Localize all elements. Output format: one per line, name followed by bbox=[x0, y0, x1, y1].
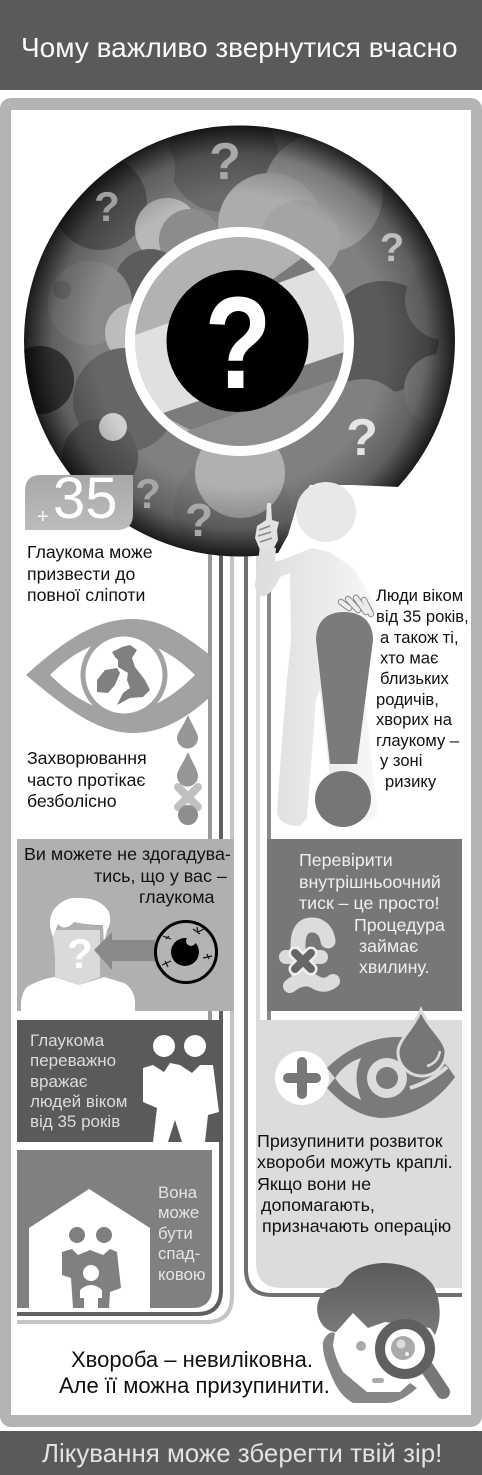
arrow bbox=[94, 932, 155, 970]
text: simple test: Перевірити bbox=[299, 850, 393, 870]
icon: face with magnifying glass bbox=[317, 1263, 443, 1403]
magnifying glass bbox=[427, 1368, 443, 1392]
text: risk group: ризику bbox=[385, 772, 437, 791]
text: treatment: допомагають, bbox=[261, 1195, 375, 1215]
text: risk group: від 35 років, bbox=[376, 607, 469, 626]
panel: treatment bbox=[256, 1010, 462, 1288]
text: risk group: хворих на bbox=[376, 710, 453, 729]
text: treatment: хвороби можуть краплі. bbox=[257, 1152, 453, 1172]
text: over 35: переважно bbox=[30, 1051, 116, 1070]
text: painless: безболісно bbox=[27, 791, 117, 811]
small question marks bbox=[94, 133, 404, 546]
text: over 35: людей віком bbox=[30, 1092, 127, 1111]
panel: hereditary bbox=[17, 1150, 212, 1308]
exclamation mark bbox=[316, 612, 373, 764]
text: over 35: від 35 років bbox=[30, 1112, 120, 1131]
small question marks: ? bbox=[346, 409, 378, 467]
bubbles bbox=[24, 126, 455, 556]
icon: pound sign crossed bbox=[286, 925, 333, 986]
text: unaware: Ви можете не здогадува- bbox=[24, 844, 231, 864]
text: painless: часто протікає bbox=[27, 770, 145, 790]
footer banner: Лікування може зберегти твій зір! bbox=[42, 1440, 442, 1468]
text: simple test: тиск – це просто! bbox=[299, 893, 439, 913]
figure with exclamation mark bbox=[255, 482, 378, 827]
+35 badge: + bbox=[37, 506, 49, 528]
face bbox=[333, 1313, 430, 1392]
hand pointing up bbox=[255, 503, 279, 550]
text: unaware: тись, що у вас – bbox=[94, 866, 227, 886]
text: blindness: Глаукома може bbox=[27, 542, 153, 562]
text: simple test: Процедура bbox=[354, 915, 445, 935]
text: hereditary: Вона bbox=[158, 1183, 198, 1202]
white cut-out behind person bbox=[262, 485, 460, 580]
central ring with question mark bbox=[130, 230, 350, 460]
icon: person with question mark: ? bbox=[67, 930, 93, 977]
small question marks: ? bbox=[94, 183, 120, 230]
text: incurable but can be stopped: Хвороба – невиліковна. bbox=[71, 1347, 313, 1372]
text: simple test: хвилину. bbox=[359, 957, 429, 977]
icon: two people bbox=[143, 1035, 219, 1142]
panel: simple test bbox=[267, 839, 462, 1011]
text: risk group: а також ті, bbox=[380, 628, 459, 647]
text: painless: Захворювання bbox=[27, 748, 147, 768]
text: simple test: займає bbox=[359, 936, 418, 956]
text: over 35: Глаукома bbox=[30, 1031, 105, 1050]
text: risk group: у зоні bbox=[380, 751, 422, 770]
small question marks: ? bbox=[209, 133, 241, 191]
text: unaware: глаукома bbox=[139, 887, 215, 907]
header banner bbox=[0, 0, 482, 90]
icon: house with family bbox=[29, 1189, 150, 1308]
text: hereditary: бути bbox=[158, 1224, 193, 1243]
icon: bloodshot eyeball bbox=[156, 922, 216, 982]
big question-mark circle bbox=[24, 126, 455, 556]
small question marks: ? bbox=[185, 494, 213, 546]
small question marks: ? bbox=[380, 226, 404, 270]
map of British Isles bbox=[97, 645, 150, 705]
text: hereditary: спад- bbox=[158, 1244, 200, 1263]
text: blindness: повної сліпоти bbox=[27, 585, 145, 605]
text: treatment: Призупинити розвиток bbox=[257, 1131, 443, 1151]
panel: unaware bbox=[17, 839, 236, 1011]
text: treatment: Якщо вони не bbox=[257, 1174, 371, 1194]
+35 badge: 35 bbox=[53, 466, 118, 531]
text: risk group: Люди віком bbox=[376, 586, 463, 605]
panel: mostly over 35 bbox=[17, 1020, 223, 1142]
text: over 35: вражає bbox=[30, 1072, 88, 1091]
icon: person with question mark bbox=[21, 898, 135, 1011]
text: risk group: близьких bbox=[380, 669, 449, 688]
text: blindness: призвести до bbox=[27, 564, 135, 584]
text: risk group: родичів, bbox=[376, 690, 439, 709]
jaw outline bbox=[323, 1332, 417, 1403]
icon: eye with British Isles bbox=[26, 619, 210, 733]
text: risk group: глаукому – bbox=[376, 731, 460, 750]
icon: drops and cross bbox=[177, 715, 198, 825]
icon: eye with drop and plus bbox=[275, 1010, 455, 1118]
text: hereditary: може bbox=[158, 1203, 199, 1222]
central ring with question mark: ? bbox=[204, 269, 272, 416]
text: incurable but can be stopped: Але її можна призупинити. bbox=[59, 1373, 330, 1398]
vertical connector stripes bbox=[17, 540, 462, 1322]
hair bbox=[317, 1263, 440, 1335]
text: treatment: призначають операцію bbox=[262, 1216, 451, 1236]
text: simple test: внутрішньоочний bbox=[299, 872, 441, 892]
title: Чому важливо звернутися вчасно bbox=[21, 32, 458, 63]
text: hereditary: ковою bbox=[158, 1265, 206, 1284]
+35 badge bbox=[25, 466, 133, 531]
text: risk group: хто має bbox=[380, 648, 439, 668]
head bbox=[296, 482, 356, 542]
hand on exclamation mark bbox=[341, 598, 371, 614]
question mark beside badge: ? bbox=[135, 470, 161, 517]
footer banner bbox=[0, 1431, 482, 1475]
